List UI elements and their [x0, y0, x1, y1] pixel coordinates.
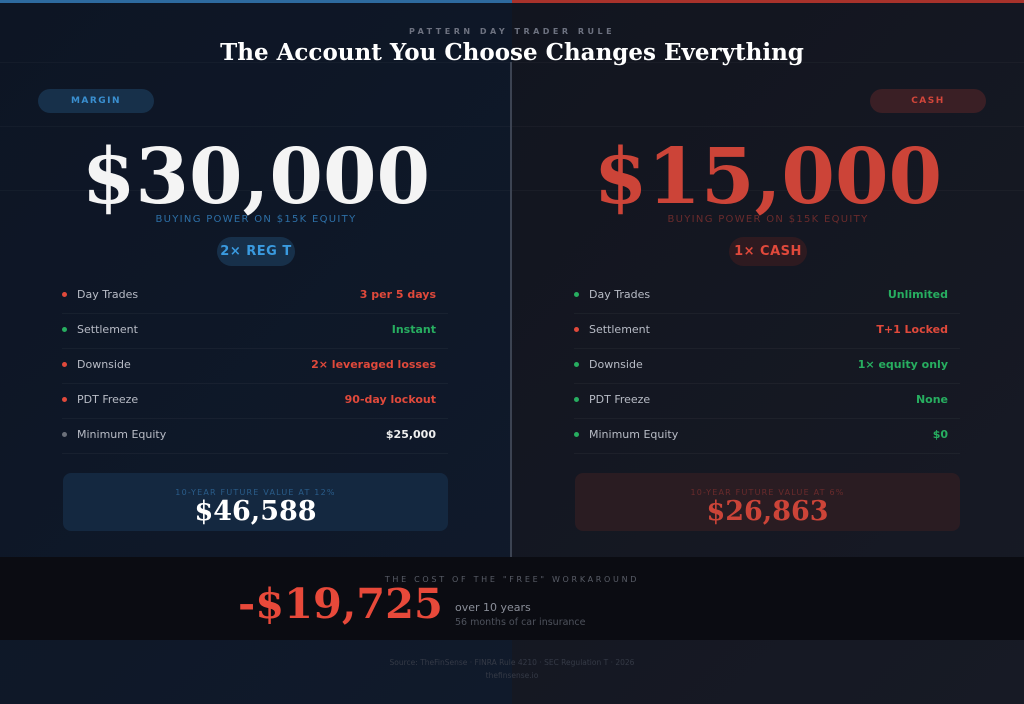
panel: margin [38, 89, 448, 531]
rows: cash: Minimum Equity [589, 428, 678, 441]
rows: cash: Unlimited [888, 288, 948, 301]
badge: margin [38, 89, 154, 113]
cost caption: 56 months of car insurance [455, 617, 586, 628]
rows: cash: T+1 Locked [876, 323, 948, 336]
rows: margin: PDT Freeze [77, 393, 138, 406]
future value box: margin: 10-YEAR FUTURE VALUE AT 12% [175, 488, 336, 497]
big number: margin: $30,000 [82, 132, 430, 222]
pill: 1x cash [729, 237, 807, 266]
rows: margin: Instant [392, 323, 436, 336]
rows: margin: 3 per 5 days [360, 288, 436, 301]
panel: cash [574, 89, 986, 531]
rows: cash: None [916, 393, 948, 406]
future value box: margin: $46,588 [194, 496, 317, 527]
badge: cash [870, 89, 986, 113]
pill: 2x reg t: 2× REG T [220, 244, 292, 259]
pill: 2x reg t [217, 237, 295, 266]
pill: 1x cash: 1× CASH [734, 244, 802, 259]
future value box: cash: 10-YEAR FUTURE VALUE AT 6% [690, 488, 845, 497]
future value box: cash: $26,863 [706, 496, 829, 527]
cost number: -$19,725 [238, 579, 443, 628]
rows: margin: 2× leveraged losses [311, 358, 436, 371]
rows: cash [574, 288, 960, 454]
rows: margin: Downside [77, 358, 131, 371]
footer: thefinsense.io [486, 671, 538, 680]
big number: cash: $15,000 [594, 132, 942, 222]
cost caption [455, 601, 586, 628]
rows: cash: Day Trades [589, 288, 650, 301]
cost caption: over 10 years [455, 601, 531, 614]
rows: margin: Minimum Equity [77, 428, 166, 441]
future value box: margin [63, 473, 448, 531]
rows: margin: Day Trades [77, 288, 138, 301]
rows: cash: $0 [933, 428, 948, 441]
rows: margin: Settlement [77, 323, 138, 336]
rows: margin [62, 288, 448, 454]
footer [390, 658, 634, 680]
rows: margin: 90-day lockout [345, 393, 436, 406]
rows: cash: 1× equity only [858, 358, 948, 371]
caption: BUYING POWER ON $15K EQUITY [155, 214, 356, 225]
badge: margin: MARGIN [71, 96, 121, 106]
rows: cash: Downside [589, 358, 643, 371]
band label: THE COST OF THE "FREE" WORKAROUND [385, 575, 639, 584]
rows: cash: Settlement [589, 323, 650, 336]
title: The Account You Choose Changes Everything [220, 39, 804, 66]
rows: margin: $25,000 [386, 428, 436, 441]
cost band [0, 557, 1024, 640]
badge: cash: CASH [911, 96, 945, 106]
subtitle: PATTERN DAY TRADER RULE [409, 27, 615, 36]
rows: cash: PDT Freeze [589, 393, 650, 406]
future value box: cash [575, 473, 960, 531]
footer: Source: TheFinSense · FINRA Rule 4210 · SEC Regulation T · 2026 [390, 658, 634, 667]
caption: BUYING POWER ON $15K EQUITY [667, 214, 868, 225]
